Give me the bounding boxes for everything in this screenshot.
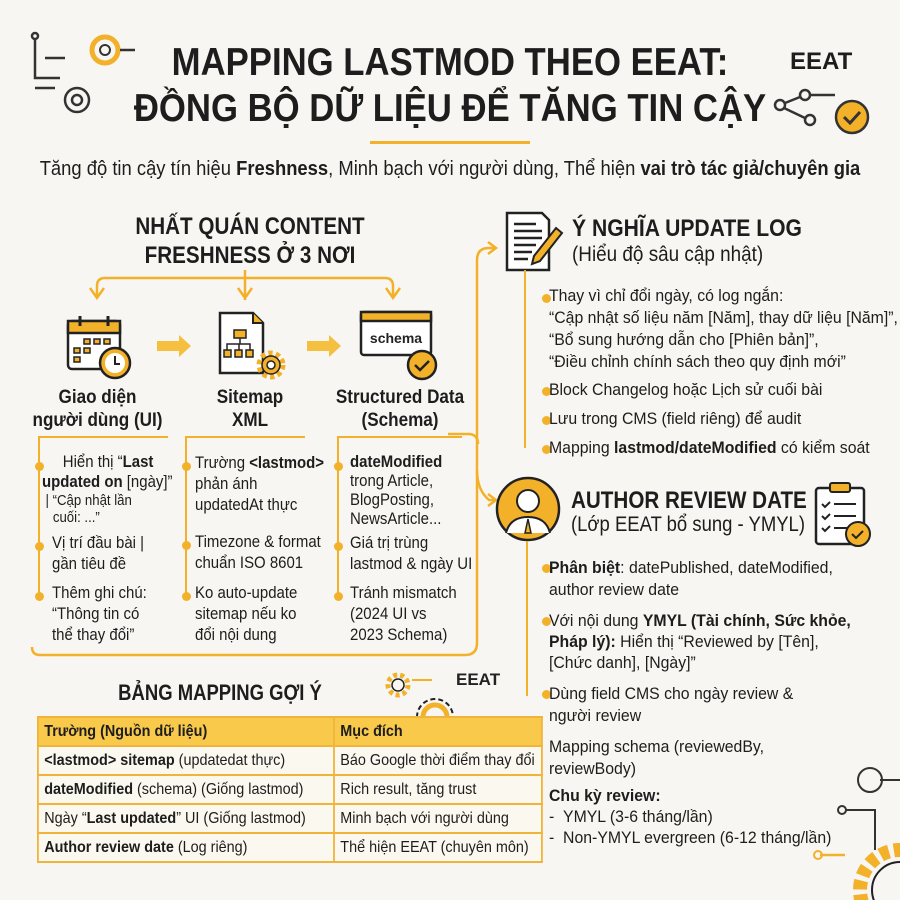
column: UI: updated on [ngày]” [42, 472, 173, 491]
column: Sitemap: Timezone & format [195, 532, 321, 551]
heading: Ý NGHĨA UPDATE LOG [572, 215, 802, 242]
decoration: top-right EEAT icon: EEAT [790, 48, 852, 75]
bullets [35, 462, 44, 471]
column: Schema: (2024 UI vs [350, 604, 427, 623]
label [336, 387, 464, 431]
icon: calendar clock [66, 316, 132, 380]
column: Schema: dateModified [350, 452, 442, 471]
panel: author review date: reviewBody) [549, 759, 636, 778]
panel: author review date: (Lớp EEAT bổ sung - YMYL) [571, 513, 805, 536]
table: mapping: Báo Google thời điểm thay đổi [340, 752, 535, 768]
column: Sitemap [182, 312, 324, 644]
panel: author review date: người review [549, 706, 641, 725]
label: (Schema) [362, 410, 438, 431]
column: Schema: trong Article, [350, 471, 433, 490]
icon: document pencil [506, 212, 564, 272]
panel: author review date: Pháp lý): Hiển thị “Reviewed by [Tên], [549, 632, 819, 651]
panel: update log: “Bổ sung hướng dẫn cho [Phiên bản]”, [549, 330, 819, 349]
column: Sitemap: Trường <lastmod> [195, 453, 324, 472]
subtitle: Tăng độ tin cậy tín hiệu Freshness, Minh bạch với người dùng, Thể hiện vai trò tác giả/chuyên gia [40, 158, 860, 180]
heading: AUTHOR REVIEW DATE [571, 487, 807, 514]
panel: update log [506, 212, 898, 457]
panel: update log: “Cập nhật số liệu năm [Năm], thay dữ liệu [Năm]”, [549, 308, 898, 327]
panel: author review date: Phân biệt: datePublished, dateModified, [549, 558, 833, 577]
table: mapping: Trường (Nguồn dữ liệu) [44, 722, 207, 740]
decoration: bottom-right gears [813, 767, 900, 900]
table: mapping: Author review date (Log riêng) [44, 838, 247, 856]
label [33, 387, 162, 431]
column: Schema: BlogPosting, [350, 490, 434, 509]
column: Sitemap: updatedAt thực [195, 495, 297, 514]
label: Sitemap [217, 387, 283, 408]
table: mapping [37, 716, 543, 863]
column: Schema: Tránh mismatch [350, 583, 457, 602]
panel: author review date: Mapping schema (reviewedBy, [549, 737, 764, 756]
label: Giao diện [59, 387, 136, 408]
decoration: top-right EEAT icon [774, 48, 870, 134]
connector arrows: bracket [30, 241, 498, 656]
table: mapping: <lastmod> sitemap (updatedat thực) [44, 752, 285, 768]
panel: update log: Lưu trong CMS (field riêng) để audit [549, 409, 801, 428]
panel: author review date: author review date [549, 580, 679, 599]
column: UI: Hiển thị “Last [63, 452, 153, 471]
panel: author review date: Chu kỳ review: [549, 786, 661, 805]
title: ĐỒNG BỘ DỮ LIỆU ĐỂ TĂNG TIN CẬY [134, 87, 766, 130]
column: Schema: Giá trị trùng [350, 533, 428, 552]
section heading: 3 nơi: FRESHNESS Ở 3 NƠI [145, 242, 355, 269]
title: MAPPING LASTMOD THEO EEAT: [172, 41, 728, 84]
table: mapping: Minh bạch với người dùng [340, 810, 509, 826]
panel: update log: “Điều chỉnh chính sách theo quy định mới” [549, 352, 846, 371]
column: Sitemap: Ko auto-update [195, 583, 297, 602]
column: UI: “Thông tin có [52, 604, 139, 623]
heading: table: BẢNG MAPPING GỢI Ý [118, 680, 322, 705]
panel: update log: (Hiểu độ sâu cập nhật) [572, 243, 763, 266]
column: UI: gần tiêu đề [52, 554, 126, 573]
column: UI: Thêm ghi chú: [52, 583, 147, 602]
column: Schema: 2023 Schema) [350, 625, 447, 644]
icon: schema window [360, 310, 438, 380]
icon: schema window: schema [370, 330, 422, 346]
label: người dùng (UI) [33, 410, 162, 431]
column: UI: Vị trí đầu bài | [52, 533, 144, 552]
icon: EEAT gears: EEAT [456, 670, 501, 689]
table: mapping: Mục đích [340, 722, 403, 740]
bullets [182, 462, 191, 471]
table: mapping: Rich result, tăng trust [340, 780, 476, 798]
section heading: 3 nơi: NHẤT QUÁN CONTENT [135, 213, 365, 240]
panel: update log: Block Changelog hoặc Lịch sử cuối bài [549, 380, 822, 399]
column: Sitemap: chuẩn ISO 8601 [195, 553, 303, 572]
bullets [542, 564, 551, 573]
bullets [542, 294, 551, 303]
column: UI: cuối: ...” [53, 509, 100, 526]
icon: sitemap file [218, 312, 286, 380]
table: mapping: dateModified (schema) (Giống lastmod) [44, 780, 303, 798]
panel: author review date: - Non-YMYL evergreen (6-12 tháng/lần) [549, 828, 831, 847]
decoration: top-left circuit gears [30, 32, 135, 114]
panel: update log: Thay vì chỉ đổi ngày, có log ngắn: [549, 286, 783, 305]
column: UI: | “Cập nhật lần [46, 492, 132, 509]
column: Sitemap: phản ánh [195, 474, 257, 493]
column: Schema [334, 310, 472, 644]
panel: update log: Mapping lastmod/dateModified có kiểm soát [549, 438, 870, 457]
section heading: 3 nơi [135, 212, 365, 269]
column: Sitemap: sitemap nếu ko [195, 604, 296, 623]
bullets [334, 462, 343, 471]
column: Schema: lastmod & ngày UI [350, 554, 472, 573]
column: Schema: NewsArticle... [350, 509, 441, 528]
column: UI: thể thay đổi” [52, 625, 134, 644]
panel: author review date: Với nội dung YMYL (Tài chính, Sức khỏe, [549, 611, 851, 630]
icon: EEAT gears [386, 670, 501, 716]
icon: clipboard [814, 482, 871, 547]
title [134, 41, 766, 130]
column: Sitemap: đổi nội dung [195, 625, 277, 644]
panel: author review date: [Chức danh], [Ngày]” [549, 653, 696, 672]
column: UI [33, 316, 173, 644]
label: Structured Data [336, 387, 464, 408]
icon: author [496, 476, 560, 542]
table: mapping: Thể hiện EEAT (chuyên môn) [340, 838, 529, 856]
label [217, 387, 283, 431]
label: XML [232, 410, 268, 431]
table: mapping: Ngày “Last updated” UI (Giống lastmod) [44, 810, 306, 826]
arrow [307, 335, 341, 357]
panel: author review date: - YMYL (3-6 tháng/lần) [549, 807, 713, 826]
panel: author review date [496, 476, 871, 847]
panel: author review date: Dùng field CMS cho ngày review & [549, 684, 793, 703]
arrow [157, 335, 191, 357]
